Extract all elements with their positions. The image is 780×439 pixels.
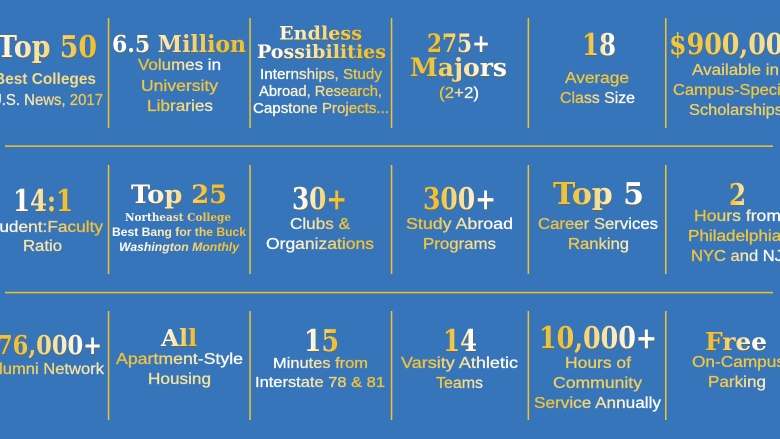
text: Student:Faculty Ratio bbox=[0, 219, 103, 255]
text: Minutes from Interstate 78 & 81: Interstate 78 & 81 bbox=[255, 374, 385, 391]
text: Hours from Philadelphia, NYC and NJ: Hours from bbox=[694, 208, 780, 225]
text: Clubs & Organizations: Clubs & bbox=[290, 216, 350, 233]
heading: Top 50: Top 50 bbox=[0, 30, 97, 65]
text: Varsity Athletic Teams: Varsity Athletic bbox=[401, 355, 518, 372]
text: Available in Campus-Specific Scholarships: Scholarships bbox=[689, 102, 780, 119]
text: Hours of Community Service Annually: Community bbox=[553, 375, 642, 392]
heading: Top 25: Top 25 bbox=[131, 180, 227, 209]
panel: 300+ study abroad bbox=[406, 182, 513, 253]
text: Apartment-Style Housing bbox=[116, 351, 243, 388]
text: Available in Campus-Specific Scholarships: Available in bbox=[692, 62, 779, 79]
heading: All: All bbox=[160, 324, 197, 352]
text: Hours of Community Service Annually bbox=[534, 355, 661, 412]
text: Career Services Ranking bbox=[538, 216, 658, 253]
panel: 2 hours from cities bbox=[688, 178, 780, 265]
text: Study Abroad Programs: Programs bbox=[423, 236, 496, 253]
panel: 14:1 ratio bbox=[0, 184, 103, 255]
panel: Endless Possibilities bbox=[253, 24, 389, 117]
text: Hours from Philadelphia, NYC and NJ: Philadelphia, bbox=[688, 228, 780, 245]
text: Average Class Size bbox=[560, 70, 635, 107]
heading: Endless Possibilities: Endless bbox=[279, 24, 362, 44]
text: Internships, Study Abroad, Research, Capstone Projects: Abroad, Research, bbox=[259, 83, 382, 100]
text: Hours from Philadelphia, NYC and NJ: NYC and NJ bbox=[691, 248, 780, 265]
text: (2+2): (2+2) bbox=[439, 85, 479, 102]
text: Clubs & Organizations bbox=[266, 216, 374, 253]
panel: 30+ clubs bbox=[266, 182, 374, 253]
text: Minutes from Interstate 78 & 81: Minutes from bbox=[273, 355, 368, 372]
panel: 76,000+ alumni bbox=[0, 330, 105, 378]
heading: 14: 14 bbox=[443, 324, 477, 359]
text: Minutes from Interstate 78 & 81 bbox=[255, 355, 385, 391]
text: Apartment-Style Housing: Housing bbox=[148, 371, 211, 388]
heading: 275+ Majors: 275+ bbox=[427, 29, 490, 58]
text: On-Campus Parking bbox=[692, 354, 780, 391]
text: Hours of Community Service Annually: Service Annually bbox=[534, 395, 661, 412]
text: Northeast College: Northeast College bbox=[125, 211, 231, 224]
heading: 30+: 30+ bbox=[292, 182, 347, 217]
text: Average Class Size: Class Size bbox=[560, 90, 635, 107]
heading: 10,000+: 10,000+ bbox=[539, 321, 657, 356]
text: Study Abroad Programs bbox=[406, 216, 513, 253]
text: Best Bang for the Buck: Best Bang for the Buck bbox=[112, 227, 247, 239]
text: Clubs & Organizations: Organizations bbox=[266, 236, 374, 253]
text: Volumes in University Libraries: University bbox=[141, 78, 218, 95]
heading: 300+: 300+ bbox=[423, 182, 496, 217]
text: Internships, Study Abroad, Research, Capstone Projects: Internships, Study bbox=[260, 66, 382, 83]
text: Varsity Athletic Teams bbox=[401, 355, 518, 392]
heading: 275+ Majors bbox=[410, 29, 507, 82]
text: Internships, Study Abroad, Research, Capstone Projects: Capstone Projects... bbox=[253, 100, 389, 117]
text: Career Services Ranking: Career Services bbox=[538, 216, 658, 233]
panel: 275+ Majors bbox=[410, 29, 507, 102]
heading: 15: 15 bbox=[304, 324, 339, 359]
panel: 18 average class size bbox=[560, 28, 635, 107]
heading: Endless Possibilities: Possibilities bbox=[257, 42, 386, 63]
panel: 15 minutes from interstate bbox=[255, 324, 385, 391]
text: Student:Faculty Ratio: Ratio bbox=[23, 238, 62, 255]
heading: 2: 2 bbox=[729, 178, 746, 213]
heading: Top 5: Top 5 bbox=[553, 177, 644, 212]
text: Volumes in University Libraries: Libraries bbox=[147, 98, 213, 115]
heading: 275+ Majors: Majors bbox=[410, 53, 507, 82]
text: Varsity Athletic Teams: Teams bbox=[436, 375, 483, 392]
heading: 14:1: 14:1 bbox=[13, 184, 73, 219]
panel: 6.5 Million volumes bbox=[112, 30, 246, 115]
panel: 10,000+ community service bbox=[534, 321, 661, 412]
panel: Top 50 best colleges bbox=[0, 30, 103, 109]
panel: 14 varsity teams bbox=[401, 324, 518, 392]
text: On-Campus Parking: Parking bbox=[708, 374, 766, 391]
heading: Free: Free bbox=[705, 327, 767, 356]
text: Career Services Ranking: Ranking bbox=[568, 236, 629, 253]
text: Apartment-Style Housing: Apartment-Style bbox=[116, 351, 243, 368]
text: Washington Monthly: Washington Monthly bbox=[119, 242, 240, 254]
panel: Top 25 best bang for the buck bbox=[112, 180, 247, 254]
heading: 6.5 Million: 6.5 Million bbox=[112, 30, 246, 58]
panel: Free parking bbox=[692, 327, 780, 391]
text: Volumes in University Libraries: Volumes in bbox=[138, 57, 221, 74]
heading: 76,000+: 76,000+ bbox=[0, 330, 102, 361]
panel: All apartment-style housing bbox=[116, 324, 243, 388]
text: On-Campus Parking: On-Campus bbox=[692, 354, 780, 371]
text: Internships, Study Abroad, Research, Capstone Projects bbox=[253, 66, 389, 117]
text: Volumes in University Libraries bbox=[138, 57, 221, 115]
heading: Endless Possibilities bbox=[257, 24, 386, 63]
text: Available in Campus-Specific Scholarships bbox=[673, 62, 780, 119]
text: Study Abroad Programs: Study Abroad bbox=[406, 216, 513, 233]
text: Hours from Philadelphia, NYC and NJ bbox=[688, 208, 780, 265]
text: Hours of Community Service Annually: Hours of bbox=[565, 355, 632, 372]
panel: Top 5 career services bbox=[538, 177, 658, 253]
panel: $900,000 scholarships bbox=[669, 27, 780, 119]
text: Average Class Size: Average bbox=[565, 70, 629, 87]
heading: 18: 18 bbox=[582, 28, 616, 63]
